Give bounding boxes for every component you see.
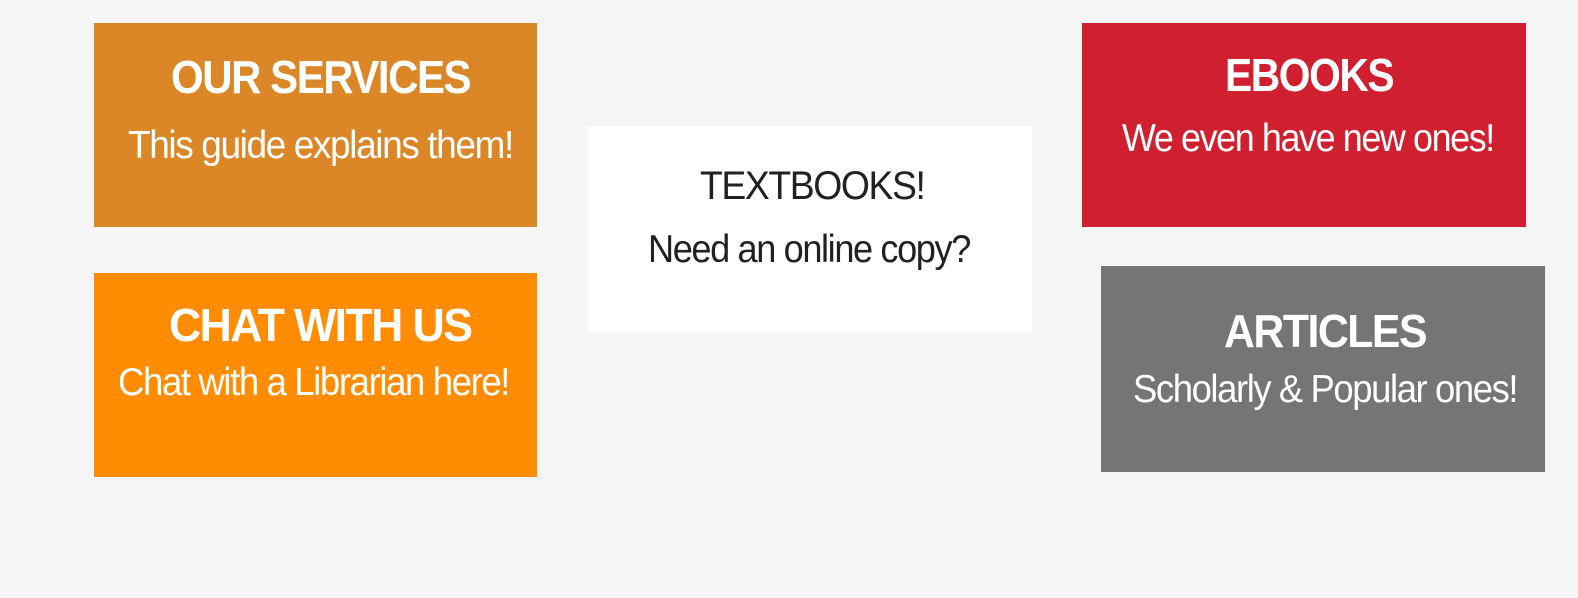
panel: textbooks	[588, 126, 1032, 332]
panel: chat with us	[94, 273, 537, 477]
text: scholarly and popular: Scholarly & Popular ones!	[1133, 368, 1517, 411]
panel: our services	[94, 23, 537, 227]
text: we even have new ones: We even have new ones!	[1122, 117, 1494, 160]
heading: our services: OUR SERVICES	[171, 51, 470, 103]
panel: articles	[1101, 266, 1545, 472]
panel: ebooks	[1082, 23, 1526, 227]
heading: textbooks: TEXTBOOKS!	[700, 164, 924, 208]
heading: ebooks: EBOOKS	[1225, 49, 1393, 101]
text: this guide explains them: This guide explains them!	[128, 124, 513, 167]
heading: articles: ARTICLES	[1224, 305, 1426, 357]
text: need an online copy: Need an online copy?	[648, 228, 970, 271]
heading: chat with us: CHAT WITH US	[169, 299, 471, 351]
text: chat with a librarian: Chat with a Librarian here!	[118, 361, 509, 404]
